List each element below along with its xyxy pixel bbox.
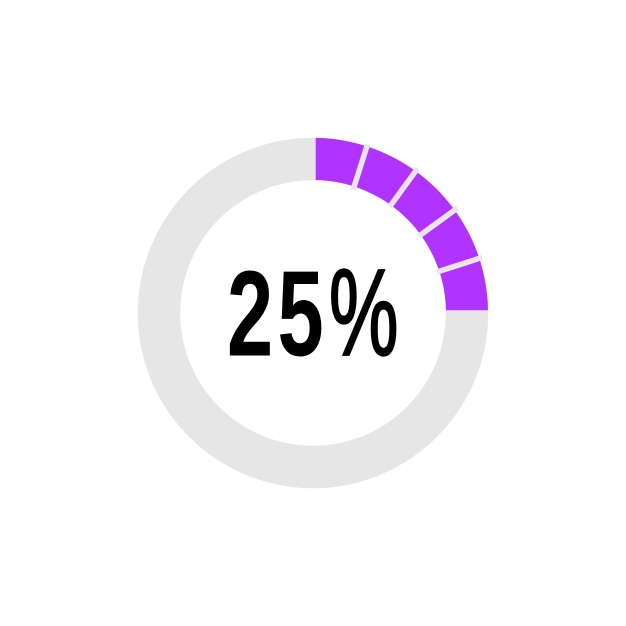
donut track — [159, 159, 467, 467]
percentage label — [227, 244, 398, 382]
segment gaps — [353, 144, 482, 272]
percentage label: % — [329, 244, 398, 381]
percentage label: 2 — [227, 247, 273, 382]
percentage label: 5 — [278, 247, 324, 382]
progress arc: 25 percent in five segments — [316, 138, 488, 310]
